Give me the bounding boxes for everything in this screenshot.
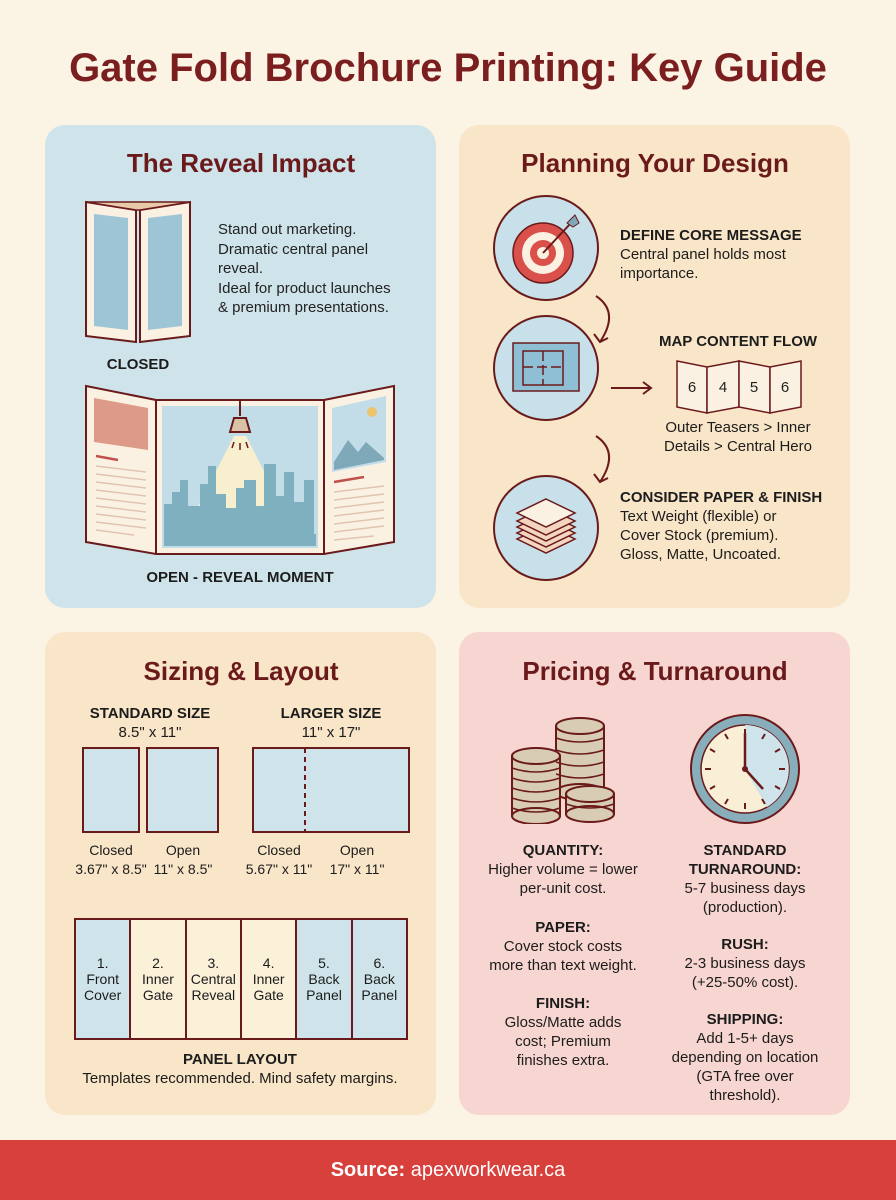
text: define core message: Central panel holds most	[620, 246, 786, 263]
diagram: panel layout: Reveal	[192, 987, 235, 1003]
text: rush	[685, 936, 805, 991]
text: shipping: SHIPPING:	[707, 1011, 783, 1028]
block: standard size: 8.5" x 11"	[119, 724, 181, 741]
diagram: panel layout: Panel	[361, 987, 397, 1003]
diagram: panel layout: Inner	[142, 971, 174, 987]
text: 5.67" x 11"	[246, 861, 312, 877]
arrow: right	[611, 381, 652, 395]
text: shipping: (GTA free over	[696, 1068, 794, 1085]
icon: clock	[690, 714, 800, 824]
text: define core message	[620, 227, 802, 282]
diagram: panel layout: Central	[191, 971, 236, 987]
text: shipping: threshold).	[710, 1087, 780, 1104]
text: quantity: per-unit cost.	[520, 880, 606, 897]
diagram: panel layout: Cover	[84, 987, 121, 1003]
diagram: size rectangles	[82, 747, 410, 833]
text: paper	[489, 919, 637, 974]
text: reveal benefits	[218, 221, 391, 316]
diagram: panel layout: 1.	[97, 955, 108, 971]
text: reveal benefits: Dramatic central panel	[218, 240, 368, 258]
text: Closed	[257, 842, 301, 858]
text: finish: cost; Premium	[515, 1033, 611, 1050]
block: standard size	[90, 705, 210, 741]
heading: sizing: Sizing & Layout	[144, 656, 338, 686]
text: map content flow: MAP CONTENT FLOW	[659, 333, 817, 350]
footer: source	[0, 1140, 896, 1200]
text: 17" x 11"	[330, 861, 384, 877]
text: shipping: Add 1-5+ days	[696, 1030, 794, 1047]
text: standard turnaround: 5-7 business days	[685, 880, 805, 897]
text: Open	[340, 842, 374, 858]
text: define core message: importance.	[620, 265, 698, 282]
text: paper & finish: Gloss, Matte, Uncoated.	[620, 546, 781, 563]
text: standard turnaround: (production).	[703, 899, 787, 916]
diagram: panel layout	[74, 918, 408, 1040]
heading: planning: Planning Your Design	[521, 148, 789, 178]
text: paper: PAPER:	[535, 919, 591, 936]
icon: open brochure	[85, 384, 395, 556]
text: panel layout caption: PANEL LAYOUT	[183, 1051, 297, 1068]
icon: paper stack circle	[493, 475, 599, 581]
panel: reveal impact	[45, 125, 436, 608]
footer: source: Source: apexworkwear.ca	[331, 1159, 565, 1181]
heading: pricing: Pricing & Turnaround	[522, 656, 788, 686]
diagram: panel layout: Gate	[143, 987, 173, 1003]
text: shipping: depending on location	[672, 1049, 818, 1066]
arrow: curved down 1	[593, 295, 610, 344]
block: larger size: LARGER SIZE	[281, 705, 381, 722]
text: reveal benefits: Stand out marketing.	[218, 221, 356, 238]
block: standard size: STANDARD SIZE	[90, 705, 210, 722]
labels: size dimensions: 3.67" x 8.5"	[75, 861, 147, 877]
text: rush: RUSH:	[721, 936, 769, 953]
diagram: panel layout: Back	[364, 971, 395, 987]
text: paper & finish: Text Weight (flexible) or	[620, 508, 776, 525]
panel: planning your design	[459, 125, 850, 608]
diagram: panel layout: 2.	[152, 955, 164, 971]
block: larger size	[281, 705, 381, 741]
icon: blueprint circle	[493, 315, 599, 421]
icon: folded panels 6 4 5 6: 4	[719, 379, 727, 396]
labels: size dimensions	[75, 842, 147, 877]
block: larger size: 11" x 17"	[302, 724, 360, 741]
text: define core message: DEFINE CORE MESSAGE	[620, 227, 802, 244]
icon: folded panels 6 4 5 6: 6	[688, 379, 696, 396]
title: Gate Fold Brochure Printing: Key Guide	[69, 46, 827, 90]
panel: sizing & layout	[45, 632, 436, 1115]
diagram: panel layout: 6.	[373, 955, 385, 971]
text: flow description	[664, 419, 812, 455]
text: quantity: QUANTITY:	[523, 842, 603, 859]
label: closed: CLOSED	[107, 356, 169, 373]
text: paper & finish: Cover Stock (premium).	[620, 527, 778, 544]
text: panel layout caption	[82, 1051, 398, 1087]
text: Open	[166, 842, 200, 858]
text: quantity: Higher volume = lower	[488, 861, 638, 878]
diagram: panel layout: Panel	[306, 987, 342, 1003]
text: rush: 2-3 business days	[685, 955, 805, 972]
text: standard turnaround	[685, 842, 805, 916]
text: paper & finish	[620, 489, 822, 563]
label: open reveal moment: OPEN - REVEAL MOMENT	[146, 569, 334, 586]
arrow: curved down 2	[593, 435, 610, 484]
text: standard turnaround: STANDARD	[703, 842, 787, 859]
text: reveal benefits: reveal.	[218, 260, 263, 277]
panel: pricing & turnaround	[459, 632, 850, 1115]
text: quantity	[488, 842, 638, 897]
text: paper: more than text weight.	[489, 957, 637, 974]
text: reveal benefits: Ideal for product launches	[218, 280, 391, 296]
icon: coins	[511, 717, 615, 824]
text: rush: (+25-50% cost).	[692, 974, 798, 991]
icon: target circle	[493, 195, 599, 301]
text: finish	[505, 995, 621, 1069]
diagram: panel layout: Gate	[253, 987, 284, 1003]
diagram: panel layout: 4.	[263, 955, 274, 971]
text: finish: FINISH:	[536, 995, 590, 1012]
text: flow description: Details > Central Hero	[664, 438, 812, 455]
text: reveal benefits: & premium presentations.	[218, 299, 389, 316]
text: standard turnaround: TURNAROUND:	[689, 861, 801, 878]
diagram: panel layout: 3.	[207, 955, 219, 971]
text: flow description: Outer Teasers > Inner	[665, 419, 811, 436]
icon: folded panels 6 4 5 6: 5	[750, 379, 758, 396]
text: paper & finish: CONSIDER PAPER & FINISH	[620, 489, 822, 506]
text: shipping	[672, 1011, 818, 1104]
diagram: panel layout: Back	[308, 971, 340, 987]
text: paper: Cover stock costs	[504, 938, 622, 955]
diagram: panel layout: 5.	[318, 955, 330, 971]
text: panel layout caption: Templates recommended. Mind safety margins.	[82, 1070, 398, 1087]
text: finish: Gloss/Matte adds	[505, 1014, 621, 1031]
icon: folded panels 6 4 5 6	[676, 360, 802, 414]
diagram: panel layout: Inner	[253, 971, 285, 987]
icon: folded panels 6 4 5 6: 6	[781, 379, 789, 396]
icon: closed brochure	[85, 200, 191, 344]
heading: reveal impact: The Reveal Impact	[127, 148, 355, 178]
text: 11" x 8.5"	[154, 861, 212, 877]
text: finish: finishes extra.	[517, 1052, 609, 1069]
diagram: panel layout: Front	[86, 971, 119, 987]
labels: size dimensions: Closed	[89, 842, 133, 858]
